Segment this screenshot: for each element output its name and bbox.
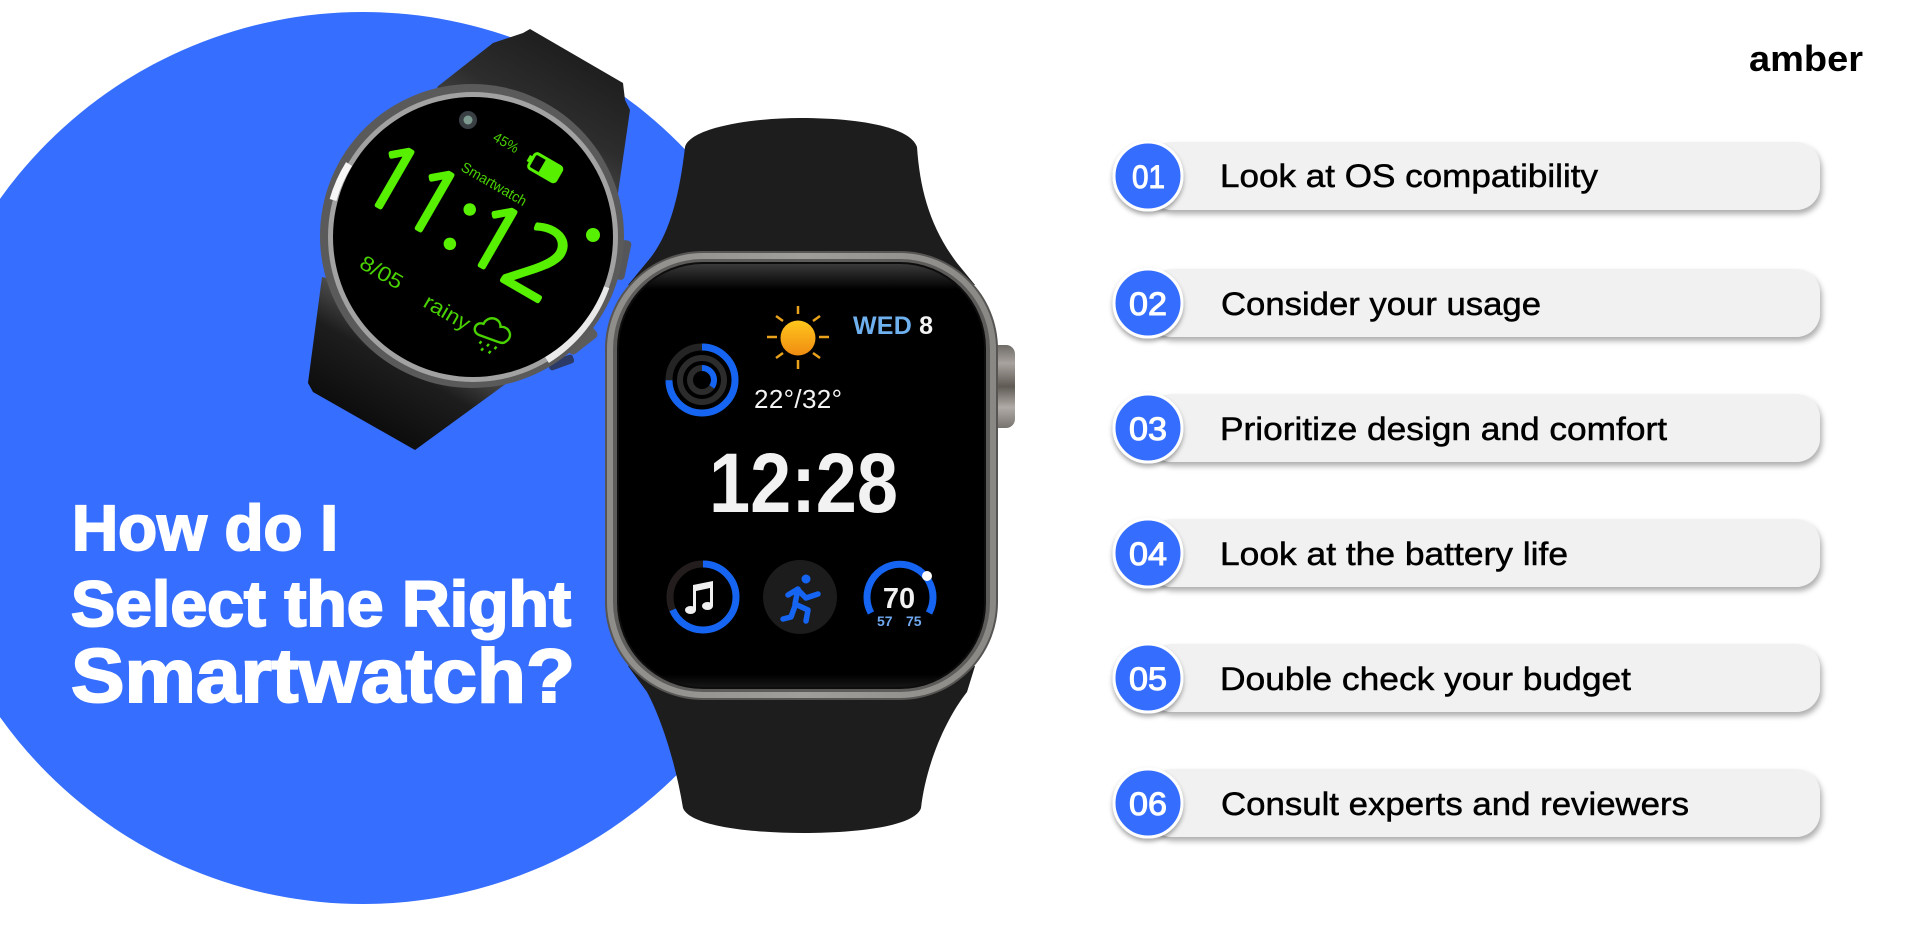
time 11:12: : [425, 183, 492, 272]
temperature gauge complication [867, 564, 933, 629]
item 04 [1114, 519, 1820, 587]
digital crown [986, 345, 1015, 428]
item 05: 05 [1129, 661, 1167, 697]
title: How do I [72, 492, 338, 564]
item 06 [1114, 769, 1820, 837]
time 11:12: 1 [449, 187, 540, 290]
Smartwatch label: Smartwatch [458, 160, 529, 210]
date: WED 8: WED 8 [853, 312, 933, 340]
time 11:12 [346, 127, 587, 319]
temperature gauge complication: 75 [906, 613, 922, 629]
music complication [670, 564, 736, 630]
round watch bezel [320, 84, 624, 388]
item 01 [1114, 142, 1820, 210]
time 12:28: 12:28 [709, 436, 898, 530]
round watch lower strap [308, 277, 507, 450]
round watch upper strap [437, 29, 630, 200]
green dot [586, 228, 600, 242]
item 01: Look at OS compatibility [1220, 158, 1598, 194]
weather label: rainy [420, 290, 475, 336]
temperature gauge complication: 70 [883, 583, 915, 615]
round watch side buttons [547, 239, 632, 371]
time 11:12: 2 [489, 206, 587, 319]
blue background circle [0, 12, 809, 904]
title: Smartwatch? [71, 634, 575, 719]
item 05: Double check your budget [1220, 661, 1631, 697]
workout complication [763, 560, 837, 634]
temperature gauge complication: 57 [877, 613, 893, 629]
icon: rain cloud [468, 313, 514, 358]
icon: runner [783, 576, 818, 621]
time 11:12: 1 [386, 150, 477, 253]
item 06: 06 [1129, 786, 1167, 822]
temperature: 22°/32° [754, 384, 842, 414]
icon: battery [524, 151, 563, 183]
icon: sun [767, 306, 829, 369]
item 01: 01 [1132, 159, 1165, 195]
square watch top strap [628, 118, 975, 285]
date: 8/05 [356, 251, 407, 294]
item 03 [1114, 394, 1820, 462]
title: Select the Right [71, 568, 571, 640]
title [71, 492, 575, 719]
item 02: 02 [1129, 286, 1167, 322]
round watch screen [333, 97, 613, 377]
item 04: Look at the battery life [1220, 536, 1568, 572]
icon: round smartwatch [308, 29, 632, 450]
item 02 [1114, 269, 1820, 337]
item 04: 04 [1129, 536, 1167, 572]
logo: amber: amber [1749, 38, 1863, 79]
square watch case [605, 251, 998, 700]
bezel highlights [333, 164, 349, 200]
square watch bottom strap [628, 666, 975, 833]
item 03: Prioritize design and comfort [1220, 411, 1667, 447]
item 06: Consult experts and reviewers [1221, 786, 1689, 822]
camera [459, 111, 477, 129]
icon: square smartwatch [605, 118, 1015, 833]
icon: music note [685, 581, 713, 614]
item 05 [1114, 644, 1820, 712]
item 02: Consider your usage [1221, 286, 1541, 322]
item 03: 03 [1129, 411, 1167, 447]
battery percentage: 45% [490, 129, 522, 156]
activity rings [669, 347, 735, 413]
time 11:12: 1 [346, 127, 437, 230]
